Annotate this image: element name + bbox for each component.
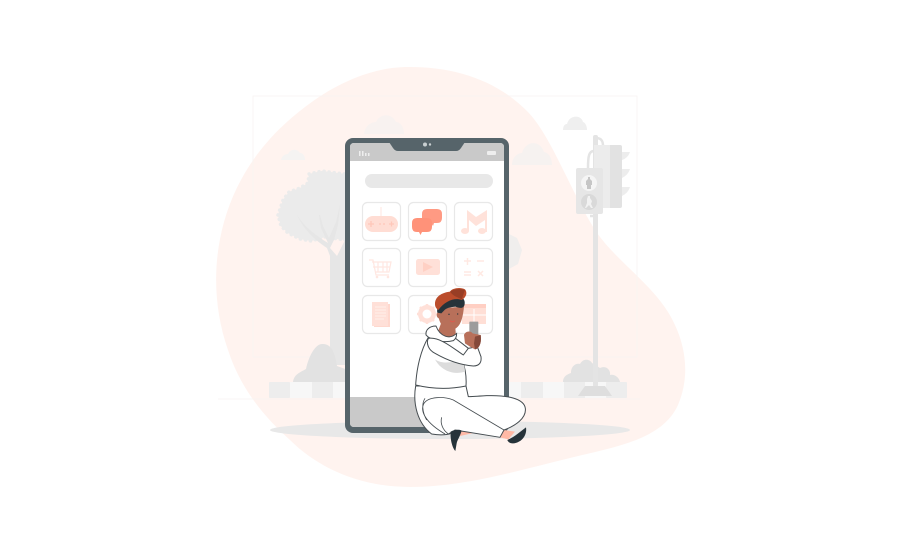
tile: shopping cart <box>362 248 400 286</box>
pavement <box>269 382 627 398</box>
vehicle signal <box>594 145 610 208</box>
torso <box>416 337 468 388</box>
sleeve shadow <box>435 359 465 373</box>
pole base <box>578 386 612 396</box>
status bar <box>350 143 504 161</box>
tile: video player <box>408 248 446 286</box>
tile: document <box>362 296 400 334</box>
cloud far right <box>563 117 587 130</box>
bottom bar <box>350 397 504 427</box>
hood <box>426 326 457 342</box>
tile: settings gear <box>408 296 446 334</box>
neck and chest <box>437 322 456 339</box>
search bar <box>365 174 493 188</box>
bush left <box>293 344 348 382</box>
ground shadow <box>270 421 630 439</box>
status battery icon <box>487 151 496 155</box>
cap <box>435 288 466 310</box>
pole arch <box>588 138 603 216</box>
tile: music note <box>454 202 492 240</box>
top leg contour <box>423 398 504 434</box>
tree foliage <box>278 171 345 241</box>
eyes and smile <box>448 314 450 315</box>
near arm sleeve <box>427 338 481 366</box>
notch <box>389 142 465 151</box>
person <box>415 288 526 451</box>
ankles <box>457 430 515 439</box>
tree <box>278 171 345 365</box>
shoe right <box>507 427 526 443</box>
background blob <box>216 67 685 487</box>
tile: calendar <box>454 296 492 334</box>
phone held <box>469 322 478 337</box>
phone body <box>345 138 509 433</box>
cloud left <box>281 150 305 160</box>
phone screen <box>350 143 504 427</box>
cloud right <box>512 143 552 165</box>
right side foliage behind phone <box>509 234 522 269</box>
tile: chat bubbles <box>408 202 446 240</box>
tile: game controller <box>362 202 400 240</box>
notch camera <box>423 142 427 146</box>
shoe left <box>451 430 462 451</box>
pole <box>593 135 598 387</box>
faint scene frame <box>218 96 640 399</box>
pedestrian signal <box>576 168 603 214</box>
bush right <box>563 360 620 382</box>
legs <box>415 386 525 437</box>
tile: calculator symbols <box>454 248 492 286</box>
hands <box>464 332 481 349</box>
tree trunk and branches <box>297 205 345 365</box>
hair <box>437 296 465 313</box>
cloud top <box>364 115 404 134</box>
status signal icon <box>359 151 370 156</box>
traffic light <box>576 135 630 396</box>
face <box>438 307 464 330</box>
phone <box>345 138 509 433</box>
